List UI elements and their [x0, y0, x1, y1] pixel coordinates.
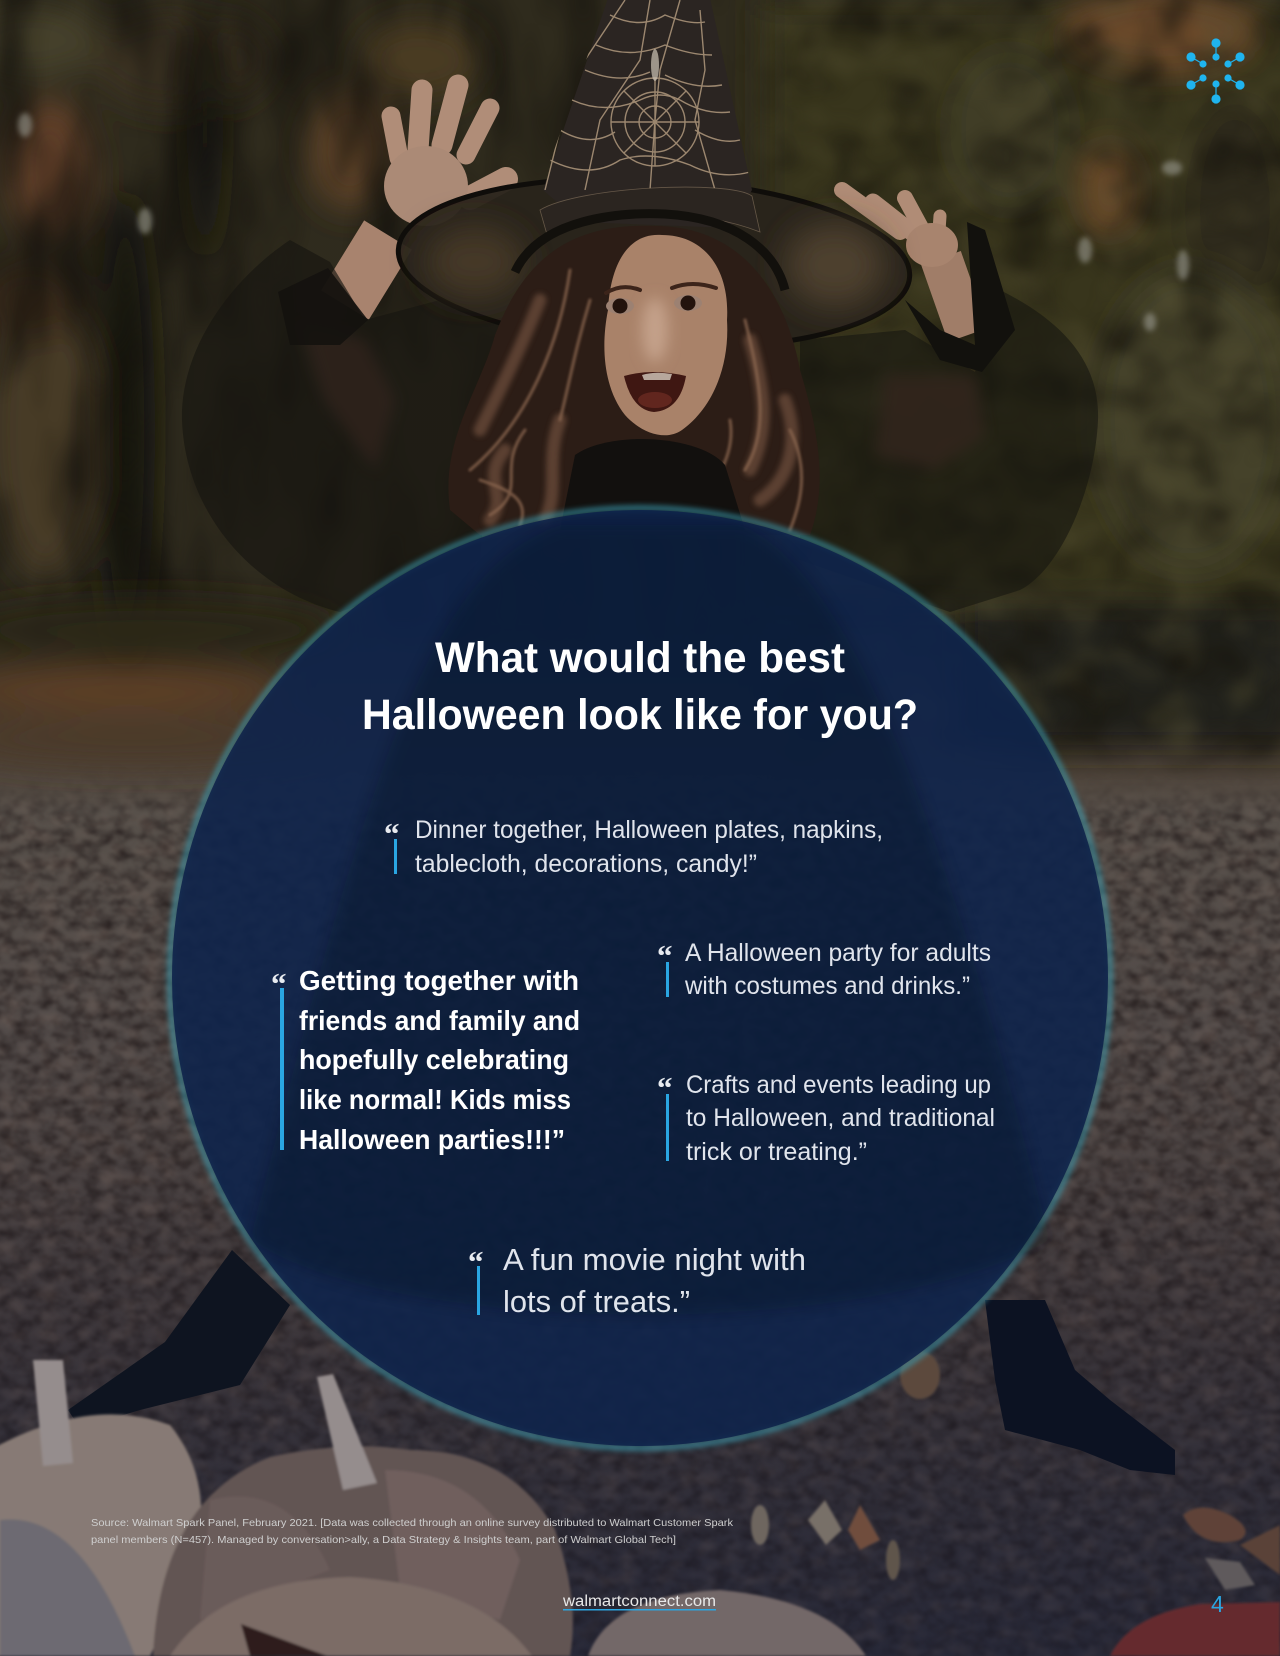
open mouth	[624, 372, 686, 412]
quote: party for adults: “	[657, 938, 672, 973]
face	[604, 235, 727, 435]
eyes	[606, 295, 702, 314]
icon: walmart spark logo	[1186, 38, 1245, 104]
pumpkin: jack-o-lantern front	[170, 1577, 532, 1656]
quote: crafts and events: Crafts and events leading up	[686, 1071, 991, 1099]
sleeve: left	[182, 240, 500, 612]
quote: dinner together: tablecloth, decorations, candy!”	[415, 850, 757, 878]
heading	[362, 634, 918, 739]
sleeve: right	[800, 290, 1098, 612]
bright bokeh spots	[18, 113, 1189, 331]
hat band over forehead	[515, 214, 785, 290]
orange-brown ground band	[0, 600, 340, 764]
hair	[448, 226, 820, 535]
quote: getting together (bold): hopefully celebrating	[299, 1044, 569, 1075]
arm: right	[941, 258, 968, 335]
quote: dinner together	[384, 816, 883, 878]
circular quote panel	[170, 508, 1110, 1448]
forest foliage left	[0, 0, 480, 670]
hat lower cone section	[540, 187, 760, 238]
collar of dress	[560, 439, 745, 530]
pumpkin: red	[1110, 1602, 1280, 1656]
quote: dinner together: Dinner together, Halloween plates, napkins,	[415, 816, 883, 844]
hat cone with spider web pattern	[544, 0, 752, 192]
page number: 4	[1211, 1591, 1224, 1617]
foliage texture	[0, 0, 598, 597]
heading: Halloween look like for you?	[362, 691, 918, 739]
quote: movie night: A fun movie night with	[503, 1242, 806, 1277]
panel glow	[170, 508, 1110, 1448]
arm: left	[345, 235, 388, 305]
footer link: walmartconnect.com	[562, 1593, 716, 1610]
quote: getting together (bold): friends and family and	[299, 1005, 580, 1036]
quote: movie night: “	[468, 1244, 484, 1279]
fallen leaves on ground	[751, 1351, 1280, 1590]
source note: panel members (N=457). Managed by conversation>ally, a Data Strategy & Insights team, part of Walmart Global Tech]	[91, 1534, 676, 1546]
ground shading toward bottom	[0, 1150, 1280, 1656]
pumpkin: far left	[0, 1360, 201, 1656]
quote: getting together (bold): Getting together with	[299, 965, 579, 996]
quote: crafts and events: trick or treating.”	[686, 1138, 867, 1166]
ground texture	[0, 720, 1280, 1656]
quote: getting together (bold): Halloween parties!!!”	[299, 1124, 565, 1155]
girl in witch costume	[182, 0, 1098, 612]
skin under sheer sleeves	[300, 325, 985, 470]
source note	[91, 1517, 734, 1546]
source note: Source: Walmart Spark Panel, February 2021. [Data was collected through an online survey distributed to Walmart Customer Spark	[91, 1517, 734, 1529]
quote: movie night: lots of treats.”	[503, 1284, 690, 1319]
hand: raised left	[384, 85, 506, 226]
hand: raised right	[842, 190, 958, 267]
pumpkin: front right	[588, 1590, 866, 1656]
cuff: right	[905, 222, 1015, 372]
dress silhouette seen through panel	[250, 525, 1050, 1315]
quote: party for adults: A Halloween party for adults	[685, 939, 991, 967]
right leg and shoe	[985, 1300, 1175, 1475]
quote: getting together (bold): like normal! Kids miss	[299, 1084, 571, 1115]
quote: party for adults	[657, 938, 991, 1000]
quote: getting together (bold): “	[271, 966, 286, 1001]
heading: What would the best	[435, 634, 845, 682]
quote: party for adults: with costumes and drinks.”	[684, 972, 970, 1000]
cuff: left	[278, 268, 368, 345]
pumpkins in foreground	[0, 1360, 1280, 1656]
quote: movie night	[468, 1242, 806, 1319]
quote: dinner together: “	[384, 816, 400, 851]
quote: crafts and events: “	[657, 1070, 672, 1105]
pumpkin: middle	[153, 1374, 573, 1656]
hat brim	[394, 166, 914, 360]
left leg and shoe	[68, 1250, 290, 1428]
quote: crafts and events	[657, 1070, 995, 1166]
quote: getting together (bold)	[271, 965, 580, 1155]
legs and shoes outside the circle	[68, 1250, 1175, 1475]
forest foliage right	[760, 0, 1280, 750]
quote: crafts and events: to Halloween, and traditional	[686, 1104, 995, 1132]
